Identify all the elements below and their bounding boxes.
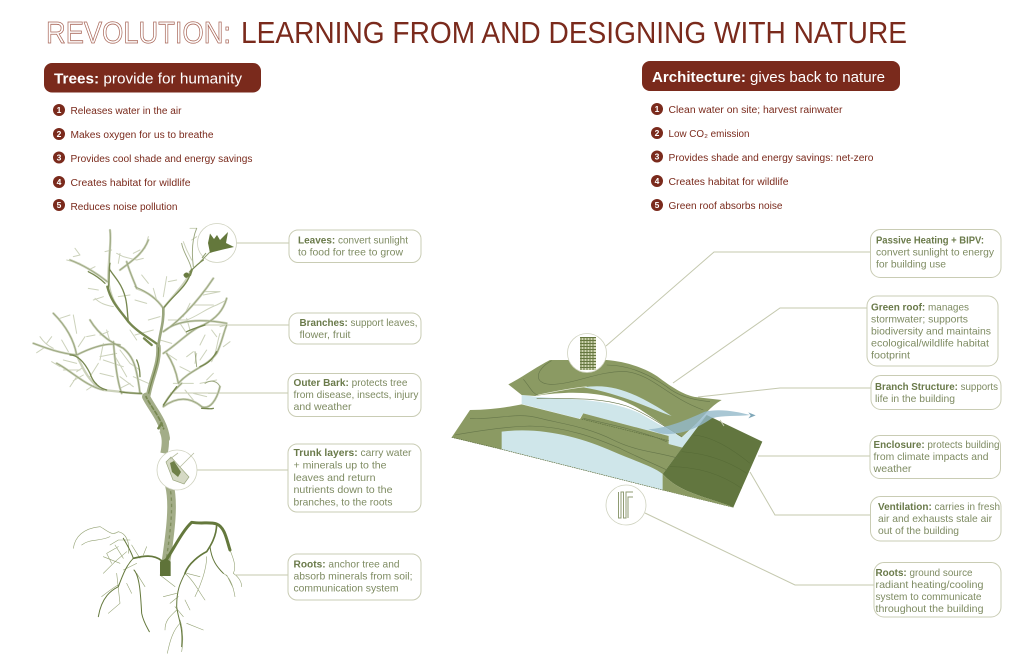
callout: branch structure (871, 376, 1001, 410)
list item 5: 5 (655, 200, 660, 210)
callout: tree roots: Roots: anchor tree and (294, 560, 400, 570)
panel: trees list (44, 63, 261, 213)
icon: ground loop pipe (606, 485, 646, 525)
callout: trunk layers: nutrients down to the (294, 485, 393, 496)
callout: branches (289, 313, 421, 344)
list item 4: Creates habitat for wildlife (70, 178, 191, 189)
callout: green roof (867, 296, 998, 366)
list item 2: Low CO₂ emission (668, 129, 750, 140)
list item 2: Makes oxygen for us to breathe (70, 130, 214, 141)
callout: green roof: footprint (871, 350, 910, 362)
leader line: green roof (673, 308, 867, 383)
leader line: building roots (645, 513, 874, 585)
callout: green roof: ecological/wildlife habitat (871, 338, 989, 350)
callout: tree roots: absorb minerals from soil; (294, 572, 412, 582)
callout: passive heating: Passive Heating + BIPV: (876, 236, 984, 246)
callout: branch structure: life in the building (875, 394, 955, 405)
callout: building roots: Roots: ground source (876, 568, 973, 579)
callout: green roof: stormwater; supports (871, 314, 968, 326)
list item 3: 3 (655, 152, 660, 162)
icon: leaf (198, 224, 236, 262)
callout: enclosure: weather (872, 464, 912, 475)
leader line: passive heating (606, 252, 870, 346)
callout: ventilation: air and exhausts stale air (878, 514, 993, 525)
list item 5 (53, 199, 178, 213)
list item 2: 2 (655, 128, 660, 138)
callout: outer bark: and weather (294, 402, 352, 413)
callout: green roof: Green roof: manages (871, 302, 969, 314)
callout: enclosure: Enclosure: protects building (874, 440, 1000, 451)
callout: trunk layers: + minerals up to the (294, 460, 387, 472)
heading: architecture: Architecture: gives back to nature (652, 69, 885, 86)
list item 5: Green roof absorbs noise (668, 201, 783, 212)
callout: outer bark (288, 374, 421, 416)
callout: outer bark: Outer Bark: protects tree (294, 378, 408, 389)
leader line: trunk layers (197, 469, 288, 471)
callout: passive heating (870, 230, 1001, 278)
callout: trunk layers: branches, to the roots (294, 498, 392, 508)
callout: tree roots (288, 554, 421, 600)
building illustration (452, 360, 762, 507)
callout: enclosure (870, 436, 1000, 478)
callout: enclosure: from climate impacts and (874, 452, 989, 463)
list item 5: Reduces noise pollution (70, 202, 178, 213)
title: LEARNING FROM AND DESIGNING WITH NATURE (241, 15, 907, 50)
heading: trees (44, 63, 261, 92)
list item 1: Clean water on site; harvest rainwater (668, 105, 843, 116)
callout: building roots (874, 562, 1001, 617)
heading: trees: Trees: provide for humanity (54, 70, 243, 88)
list item 5: 5 (57, 200, 62, 210)
callout: branch structure: Branch Structure: supports (875, 382, 998, 393)
icon: photovoltaic panel (568, 334, 606, 372)
list item 4: Creates habitat for wildlife (668, 177, 789, 188)
callout: green roof: biodiversity and maintains (871, 326, 991, 338)
list item 2: 2 (57, 129, 62, 139)
list item 4: 4 (655, 176, 660, 186)
leader line: branch structure (698, 388, 871, 397)
tree canopy illustration (33, 228, 230, 438)
callout: branches: Branches: support leaves, (300, 318, 418, 329)
leader line: outer bark (170, 392, 288, 394)
list item 1: 1 (57, 105, 62, 115)
callout: building roots: throughout the building (876, 604, 984, 615)
callout: building roots: system to communicate (876, 592, 982, 603)
list item 1: 1 (655, 104, 660, 114)
callout: ventilation (870, 496, 1001, 541)
title: REVOLUTION: (46, 15, 231, 50)
list item 2 (651, 127, 750, 140)
callout: trunk layers (288, 444, 421, 512)
panel: architecture list (642, 61, 900, 212)
callout: building roots: radiant heating/cooling (876, 580, 984, 591)
list item 1: Releases water in the air (70, 106, 182, 117)
list item 3: Provides shade and energy savings: net-zero (668, 153, 874, 164)
list item 3: 3 (57, 152, 62, 162)
leader line: ventilation (720, 420, 870, 515)
callout: passive heating: convert sunlight to energy (876, 248, 995, 258)
callout: ventilation: out of the building (878, 526, 959, 537)
leader line: branches (203, 324, 289, 326)
tree trunk and roots illustration (73, 430, 242, 653)
callout: branches: flower, fruit (300, 330, 351, 341)
callout: trunk layers: leaves and return (294, 473, 376, 484)
callout: ventilation: Ventilation: carries in fresh (878, 502, 1000, 513)
callout: tree roots: communication system (294, 584, 398, 594)
leader line: enclosure (758, 455, 870, 457)
callout: passive heating: for building use (876, 260, 946, 270)
callout: leaves: Leaves: convert sunlight (298, 236, 408, 246)
leader line: tree roots (235, 574, 288, 576)
leader line: leaves (236, 242, 289, 244)
list item 3: Provides cool shade and energy savings (70, 154, 253, 165)
callout: trunk layers: Trunk layers: carry water (294, 448, 412, 459)
heading: architecture (642, 61, 900, 91)
callout: leaves (289, 230, 421, 262)
list item 4: 4 (57, 177, 62, 187)
icon: trunk cross-section (157, 450, 197, 490)
callout: outer bark: from disease, insects, injury (294, 390, 419, 401)
air flow arrow (648, 410, 756, 434)
callout: leaves: to food for tree to grow (298, 248, 404, 258)
